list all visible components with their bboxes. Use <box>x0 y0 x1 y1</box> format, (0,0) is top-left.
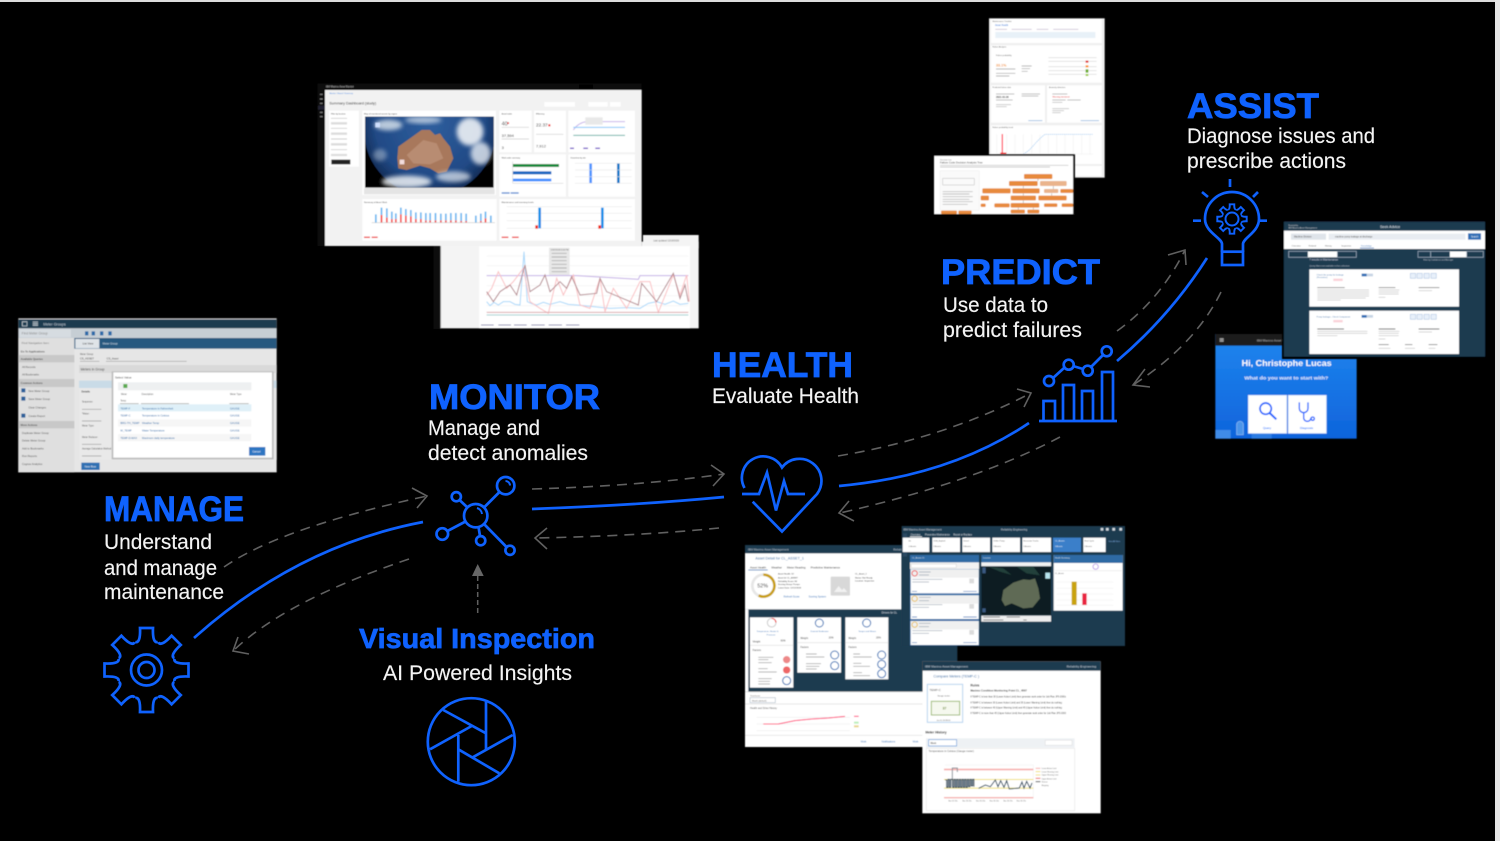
screenshot: meter groups: Sequence: <box>82 402 93 404</box>
screenshot: meter groups: Find Meter Group <box>22 332 48 336</box>
heading: visual inspection: Visual Inspection <box>359 623 595 654</box>
screenshot: asset health detail: Scoring System <box>809 595 826 598</box>
screenshot: asset health detail: Reliability <box>893 548 906 552</box>
dialog: select value: Water Temperature <box>142 428 165 432</box>
dialog: select value: Cancel <box>252 450 261 454</box>
connector: manage to monitor <box>194 488 427 654</box>
heading: predict <box>941 253 1100 342</box>
panel: stacked bars: Summary of Asset Work <box>364 201 388 204</box>
panel: kpi counts: 3 <box>502 145 505 150</box>
screenshot: compare meters: If TEMP-C is more than 45 (Upper Action Limit) then generate work order for Job Plan JP3-2000 <box>970 712 1067 715</box>
screenshot: Hi Christophe home: What do you want to start with? <box>1244 376 1328 382</box>
panel: stacked bars <box>362 199 497 241</box>
screenshot: reliability engineering overview: bb <box>909 541 912 543</box>
panel: kpi counts: 40 <box>502 122 508 128</box>
screenshot: line chart dashboard <box>433 235 699 329</box>
gauge tile: 37 <box>943 707 947 711</box>
icon: sensor network <box>436 477 515 555</box>
dialog: select value: BRG-TH_TEMP <box>120 421 140 425</box>
panel: health summary: CL_Assets <box>1055 572 1064 575</box>
panel: filters: Filter by location <box>331 112 345 115</box>
panel: health summary <box>1054 555 1123 611</box>
screenshot: asset health detail: 52% <box>757 584 768 590</box>
dialog: select value: Meter <box>121 393 127 396</box>
screenshot: predict dashboard: Failure probability trend <box>992 126 1013 129</box>
screenshot: meter groups: All Records <box>22 365 36 369</box>
screenshot: reliability engineering overview: CL_Assets <box>1055 540 1065 543</box>
meter chart: Lower Warning Limit <box>1042 770 1059 773</box>
card: driver 1 <box>750 617 793 688</box>
meter chart: Nov 02 Z4s <box>948 800 958 802</box>
dialog: select value: Select Value <box>115 375 132 379</box>
card: driver 3: Weight <box>848 637 856 640</box>
dialog: select value: W_TEMP <box>120 428 132 432</box>
panel: horizontal bars <box>499 154 566 197</box>
screenshot: meter groups: Go To Applications <box>21 349 45 353</box>
panel: trend chart <box>568 111 635 152</box>
screenshot: meter groups: Find Navigation Item <box>22 341 50 345</box>
card: result 1: (Preventive) <box>1317 276 1328 279</box>
meter chart: Upper Warning Limit <box>1042 774 1059 777</box>
panel: kpi values <box>534 111 566 152</box>
card: result 1: Check the pump for leakage <box>1317 274 1344 277</box>
screenshot: seek advice: History <box>1325 244 1333 247</box>
screenshot: reliability engineering overview: Repair or Replace <box>953 533 973 536</box>
heading: visual inspection: AI Powered Insights <box>383 662 572 685</box>
screenshot: reliability engineering overview: Overview <box>911 533 921 536</box>
icon: camera shutter <box>428 698 515 785</box>
screenshot: seek advice: 7 results in Maintenance <box>1309 258 1339 262</box>
panel: kpi values: 22.37 <box>536 123 548 128</box>
dialog: select value: GAUGE <box>230 436 240 440</box>
card: driver 2: Weight <box>800 637 808 640</box>
screenshot: compare meters: Compare Meters (TEMP-C ) <box>933 674 979 678</box>
icon: lightbulb with gear <box>1193 179 1267 265</box>
heading: predict: PREDICT <box>941 253 1100 292</box>
icon: heart with pulse <box>742 456 821 532</box>
panel: location map <box>981 555 1051 622</box>
screenshot: predict dashboard: Anomaly detection <box>1049 86 1065 89</box>
screenshot: asset health detail: Latest Date: 12/12/2018 <box>778 586 802 589</box>
screenshot: meter groups <box>18 318 277 472</box>
panel: globe map: Map of monitored assets by region <box>364 113 398 116</box>
screenshot: reliability engineering overview: Diesel <box>963 541 969 543</box>
screenshot: seek advice <box>1282 220 1486 359</box>
screenshot: meter groups: Meter Type: <box>82 424 95 427</box>
screenshot: seek advice: Filter by Confidence and Manager <box>1423 258 1454 261</box>
screenshot: compare meters: Rules <box>970 684 980 688</box>
gauge tile: TEMP-C <box>929 688 942 692</box>
dialog: select value: GAUGE <box>230 406 240 410</box>
connector: health to predict <box>838 389 1060 521</box>
screenshot: compare meters: Week <box>930 743 937 745</box>
meter chart: Sensor <box>1042 782 1048 784</box>
screenshot: reliability engineering overview <box>902 526 1125 646</box>
screenshot: meter groups: Common Actions <box>21 381 43 385</box>
gauge tile: Gauge meter <box>937 695 950 698</box>
dialog: select value: Temp <box>120 400 127 402</box>
screenshot: reliability engineering overview: Preventive Maintenance <box>925 533 951 536</box>
screenshot: predict dashboard: Failure Analysis <box>992 46 1006 49</box>
panel: globe map <box>362 111 496 194</box>
screenshot: meter groups: CS_Asset <box>107 356 119 360</box>
heading: predict: Use data to <box>943 294 1048 317</box>
screenshot: meter groups: *Meter: <box>82 413 90 416</box>
dialog: select value: Temperature in Celsius <box>142 414 170 418</box>
screenshot: reliability engineering overview: 3 Assets <box>993 545 1001 548</box>
screenshot: asset health detail: Reliability Score: 80 <box>778 580 798 583</box>
panel: kpi counts: 37,594 <box>502 133 515 138</box>
icon: predictive bar chart <box>1039 346 1117 421</box>
screenshot: asset health detail: Asset Detail for CL_ASSET_1 <box>755 557 804 561</box>
card: driver 2: Dammit Sedimator <box>811 630 829 633</box>
screenshot: seek advice: Seek Advice <box>1380 225 1400 229</box>
gauge tile: Jun 8, 03:28:00 <box>937 720 951 722</box>
card: driver 2 <box>797 617 841 673</box>
screenshot: reliability engineering overview: 2 Assets <box>1084 545 1092 548</box>
screenshot: asset health detail: Month (default) <box>752 699 767 702</box>
dialog: select value: Weather Temp <box>142 421 160 425</box>
screenshot: meter groups: Save Meter Group <box>28 397 51 401</box>
screenshot: asset health detail <box>745 545 957 747</box>
screenshot: reliability engineering overview: 2 Assets <box>933 545 941 548</box>
screenshot: meter groups: More Actions <box>21 423 38 427</box>
screenshot: meter groups: Meter Groups <box>43 322 66 326</box>
screenshot: seek advice: Machine Division <box>1294 237 1312 239</box>
screenshot: compare meters: If TEMP-C is between 30 (Lower Action Limit) and 35 (Lower Warning Limit) then do nothing <box>970 701 1063 704</box>
heading: manage: maintenance <box>104 581 224 604</box>
screenshot: reliability engineering overview: View All Sites <box>1108 540 1120 543</box>
heading: visual inspection <box>359 623 595 685</box>
screenshot: compare meters: Maximo Condition Monitoring Point CL_4507 <box>970 688 1027 692</box>
card: driver 1: Pressure <box>767 633 776 636</box>
screenshot: meter groups: Average Calculation Method <box>82 448 112 451</box>
screenshot: predict dashboard: Warning imminent <box>1052 96 1070 99</box>
screenshot: Hi Christophe home: IBM Maximo Asset Monitor <box>1257 338 1292 342</box>
screenshot: meter groups: Run Reports <box>22 454 38 458</box>
dialog: select value <box>112 371 274 459</box>
connector: monitor to health <box>532 465 724 549</box>
screenshot: meter groups: Create Report <box>28 414 45 418</box>
heading: monitor <box>428 378 600 465</box>
dialog: select value: GAUGE <box>230 428 240 432</box>
screenshot: compare meters <box>922 661 1101 813</box>
card: driver 3: Factors <box>848 646 857 649</box>
card: query: Query <box>1263 426 1272 430</box>
heading: manage: MANAGE <box>104 490 244 529</box>
screenshot: asset health detail: Drivers for CL <box>882 612 898 615</box>
screenshot: reliability engineering overview: Excavator Trucks <box>1023 540 1039 543</box>
card: driver 3: 20% <box>876 636 882 639</box>
panel: kpi values: 7,912 <box>536 143 547 148</box>
screenshot: decision tree: Failure Code Decision Analysis Tree <box>940 160 983 164</box>
screenshot: asset health detail: Scoring Group: Pumps <box>778 583 800 586</box>
screenshot: asset health detail: Meter Reading <box>787 566 806 570</box>
card: diagnosis <box>1288 395 1326 433</box>
screenshot: meter groups: Meter Group <box>103 342 118 346</box>
card: driver 2: 20% <box>829 636 834 639</box>
screenshot: meter groups: New Row <box>85 465 96 469</box>
meter chart: Mapping <box>1042 785 1049 787</box>
screenshot: asset health detail: IBM Maximo Asset Management <box>748 548 789 552</box>
heading: assist: ASSIST <box>1187 87 1319 126</box>
screenshot: meter groups: Meters in Group <box>81 367 105 371</box>
screenshot: asset health detail: Weather <box>771 566 782 570</box>
screenshot: compare meters: Meter History <box>925 731 947 735</box>
screenshot: asset health detail: Predictive Maintenance <box>811 566 840 570</box>
screenshot: line chart dashboard: 12/07/2020 6:00 PM <box>551 250 569 252</box>
screenshot: predict dashboard: 2021-01-26 <box>996 96 1009 99</box>
card: driver 1: Factors <box>753 649 762 652</box>
heading: health: HEALTH <box>712 346 853 385</box>
screenshot: reliability engineering overview: Chiller Pump <box>993 540 1006 543</box>
heading: manage: Understand <box>104 531 212 554</box>
panel: asset list: CL_Assets 15 <box>912 557 925 560</box>
screenshot: asset health detail: Health and Drive History <box>750 707 778 710</box>
screenshot: summary dashboard with globe: Monitor / Board / Summary <box>329 92 353 95</box>
dialog: select value: TEMP-C <box>120 414 131 418</box>
heading: assist <box>1187 87 1375 173</box>
screenshot: reliability engineering overview: IBM Maximo Asset Management <box>903 527 942 531</box>
heading: monitor: detect anomalies <box>428 442 588 465</box>
screenshot: asset health detail: Asset Id: CL_ASSET <box>778 576 799 579</box>
panel: asset list <box>910 555 979 646</box>
screenshot: meter groups: Details <box>81 390 91 394</box>
screenshot: predict dashboard: Predicted failure date <box>992 86 1012 89</box>
screenshot: asset health detail: Asset Health <box>750 566 766 570</box>
panel: kpi values: Efficiency <box>536 114 544 116</box>
screenshot: decision tree: Decision tree <box>940 159 952 162</box>
meter chart: Nov 30 Z4s <box>990 800 999 802</box>
heading: manage: and manage <box>104 557 217 580</box>
screenshot: seek advice: IBM Maximo Asset Management <box>1288 226 1317 229</box>
screenshot: predict dashboard: 33.1% <box>996 64 1007 68</box>
meter chart <box>926 748 1075 811</box>
screenshot: meter groups: Duplicate Meter Group <box>22 431 49 435</box>
connector: visual inspection to monitor <box>472 564 484 613</box>
dialog: select value: Maximum daily temperature <box>142 436 175 440</box>
screenshot: line chart dashboard: Last updated 12/18/2020 <box>653 239 680 242</box>
icon: gear <box>104 628 188 712</box>
dialog: select value: GAUGE <box>230 414 240 418</box>
screenshot: seek advice: Inspection <box>1341 244 1352 247</box>
screenshot: meter groups: Delete Meter Group <box>22 439 46 443</box>
card: driver 2: Factors <box>800 646 809 649</box>
heading: monitor: Manage and <box>428 417 540 440</box>
heading: monitor: MONITOR <box>429 378 600 417</box>
meter chart: Nov 30 Z4s <box>962 800 972 802</box>
panel: filters <box>329 111 359 167</box>
screenshot: seek advice: Powered by <box>1288 225 1298 227</box>
screenshot: asset health detail: Refresh Score <box>784 595 800 598</box>
screenshot: predict dashboard: Maintenance Timeline <box>992 20 1013 23</box>
screenshot: reliability engineering overview: 4 Assets <box>909 545 916 548</box>
heading: health <box>712 346 859 408</box>
card: driver 1: Temperature, Heater & <box>757 630 779 633</box>
panel: health summary: Health Summary <box>1055 556 1070 559</box>
screenshot: Hi Christophe home: Hi, Christophe Lucas <box>1242 359 1332 368</box>
meter chart: Upper Action Limit <box>1042 777 1057 780</box>
meter chart: Temperature in Celsius (Gauge meter) <box>929 749 974 753</box>
screenshot: reliability engineering overview: 6 Assets <box>963 545 971 548</box>
card: driver 1: 60% <box>781 640 786 643</box>
meter chart: Nov 30 Z3s <box>1003 800 1013 802</box>
dialog: select value: TEMP-D-MAX <box>120 436 137 440</box>
panel: vertical bars: Downtime by site <box>571 156 587 159</box>
card: driver 1: Weight <box>753 640 761 643</box>
heading: health: Evaluate Health <box>712 385 859 408</box>
meter chart: Nov 30 Z3s <box>1017 800 1026 802</box>
screenshot: reliability engineering overview: Heat Cycle <box>1084 540 1095 543</box>
screenshot: asset health detail: Timeframe <box>750 694 761 697</box>
screenshot: asset health detail: Work <box>861 741 867 744</box>
screenshot: predict dashboard: Failure probability <box>996 54 1012 57</box>
panel: kpi counts <box>499 111 532 152</box>
dialog: select value: Temperature in Fahrenheit <box>142 406 173 410</box>
card: result 2 <box>1309 311 1459 354</box>
screenshot: seek advice: machine pump leakage at discharge <box>1335 236 1373 239</box>
gauge tile <box>927 684 963 722</box>
card: query <box>1248 395 1287 433</box>
card: result 2: Pump leakage - Check Component <box>1317 315 1351 318</box>
panel: vertical bars <box>568 154 635 197</box>
screenshot: asset health detail: Status: Not Ready <box>855 576 873 579</box>
screenshot: meter groups: Cognos Analytics <box>22 462 43 466</box>
screenshot: meter groups: Add to Bookmarks <box>22 446 44 450</box>
screenshot: seek advice: Related <box>1309 244 1317 247</box>
screenshot: meter groups: Meter Group: <box>80 353 94 356</box>
screenshot: predict dashboard: Asset Health <box>995 24 1009 27</box>
screenshot: predict dashboard <box>989 18 1105 178</box>
screenshot: seek advice: Knowledge <box>1361 245 1372 247</box>
screenshot: meter groups: Available Queries <box>21 357 43 361</box>
screenshot: meter groups: All Bookmarks <box>22 373 40 377</box>
screenshot: decision tree <box>934 154 1075 215</box>
screenshot: reliability engineering overview: CDA_Asphalt <box>933 540 946 543</box>
screenshot: summary dashboard with globe <box>318 64 642 246</box>
dialog: select value: Description <box>142 393 154 396</box>
screenshot: summary dashboard with globe: Summary Dashboard (study) <box>329 101 376 105</box>
panel: kpi counts: Asset totals <box>502 113 512 116</box>
dialog: select value: TEMP-F <box>120 406 131 410</box>
card: result 1 <box>1309 269 1459 307</box>
dialog: select value: Meter Type <box>230 393 242 396</box>
screenshot: meter groups: Clear Changes <box>28 406 47 410</box>
screenshot: asset health detail: Notifications <box>882 741 896 744</box>
heading: assist: Diagnose issues and <box>1187 125 1375 148</box>
screenshot: reliability engineering overview: 5 Assets <box>1023 545 1031 548</box>
connector: predict to assist <box>1117 250 1221 387</box>
screenshot: meter groups: CS_ASSET <box>80 356 94 360</box>
screenshot: reliability engineering overview: 3 Assets <box>1055 545 1063 548</box>
card: diagnosis: Diagnosis <box>1300 426 1314 430</box>
dialog: select value: GAUGE <box>230 421 240 425</box>
panel: horizontal bars: Work order summary <box>502 156 520 159</box>
screenshot: reliability engineering overview: Reliability Engineering <box>1001 527 1028 531</box>
heading: predict: predict failures <box>943 319 1082 342</box>
screenshot: seek advice: Overview <box>1292 244 1301 247</box>
panel: location map: Location <box>983 557 991 560</box>
screenshot: compare meters: If TEMP-C is less than 30 (Lower Action Limit) then generate work order for Job Plan JP3-2000c <box>970 696 1067 699</box>
heading: manage <box>104 490 244 604</box>
screenshot: meter groups: Meter Reducer: <box>82 436 98 439</box>
screenshot: asset health detail: Asset Health: 52 <box>778 573 795 576</box>
screenshot: asset health detail: CL_Asset_1 <box>855 573 868 576</box>
panel: grouped bars <box>499 199 635 241</box>
screenshot: compare meters: If TEMP-C is between 40 (Upper Warning Limit) and 45 (Upper Action Limit) then do nothing <box>970 707 1063 710</box>
meter chart: Nov 30 Z4s <box>976 800 985 802</box>
screenshot: asset health detail: Work <box>913 741 919 744</box>
screenshot: seek advice: Query filters not available in this collection <box>1309 264 1350 267</box>
screenshot: asset health detail: Location: Inspection <box>855 580 875 583</box>
heading: assist: prescribe actions <box>1187 150 1346 173</box>
screenshot: meter groups: New Meter Group <box>28 389 50 393</box>
meter chart: Lower Action Limit <box>1042 767 1057 770</box>
screenshot: compare meters: Reliability Engineering <box>1067 664 1097 668</box>
screenshot: Hi Christophe home <box>1215 334 1357 439</box>
screenshot: summary dashboard with globe: IBM Maximo Asset Monitor <box>326 85 354 88</box>
panel: grouped bars: Maintenance and inventory levels <box>502 201 534 204</box>
screenshot: meter groups: List View <box>83 341 93 345</box>
screenshot: compare meters: IBM Maximo Asset Management <box>925 664 968 668</box>
card: driver 3: Torque and Kilows <box>858 630 876 633</box>
screenshot: seek advice: Search <box>1471 236 1479 239</box>
card: driver 3 <box>845 617 888 679</box>
